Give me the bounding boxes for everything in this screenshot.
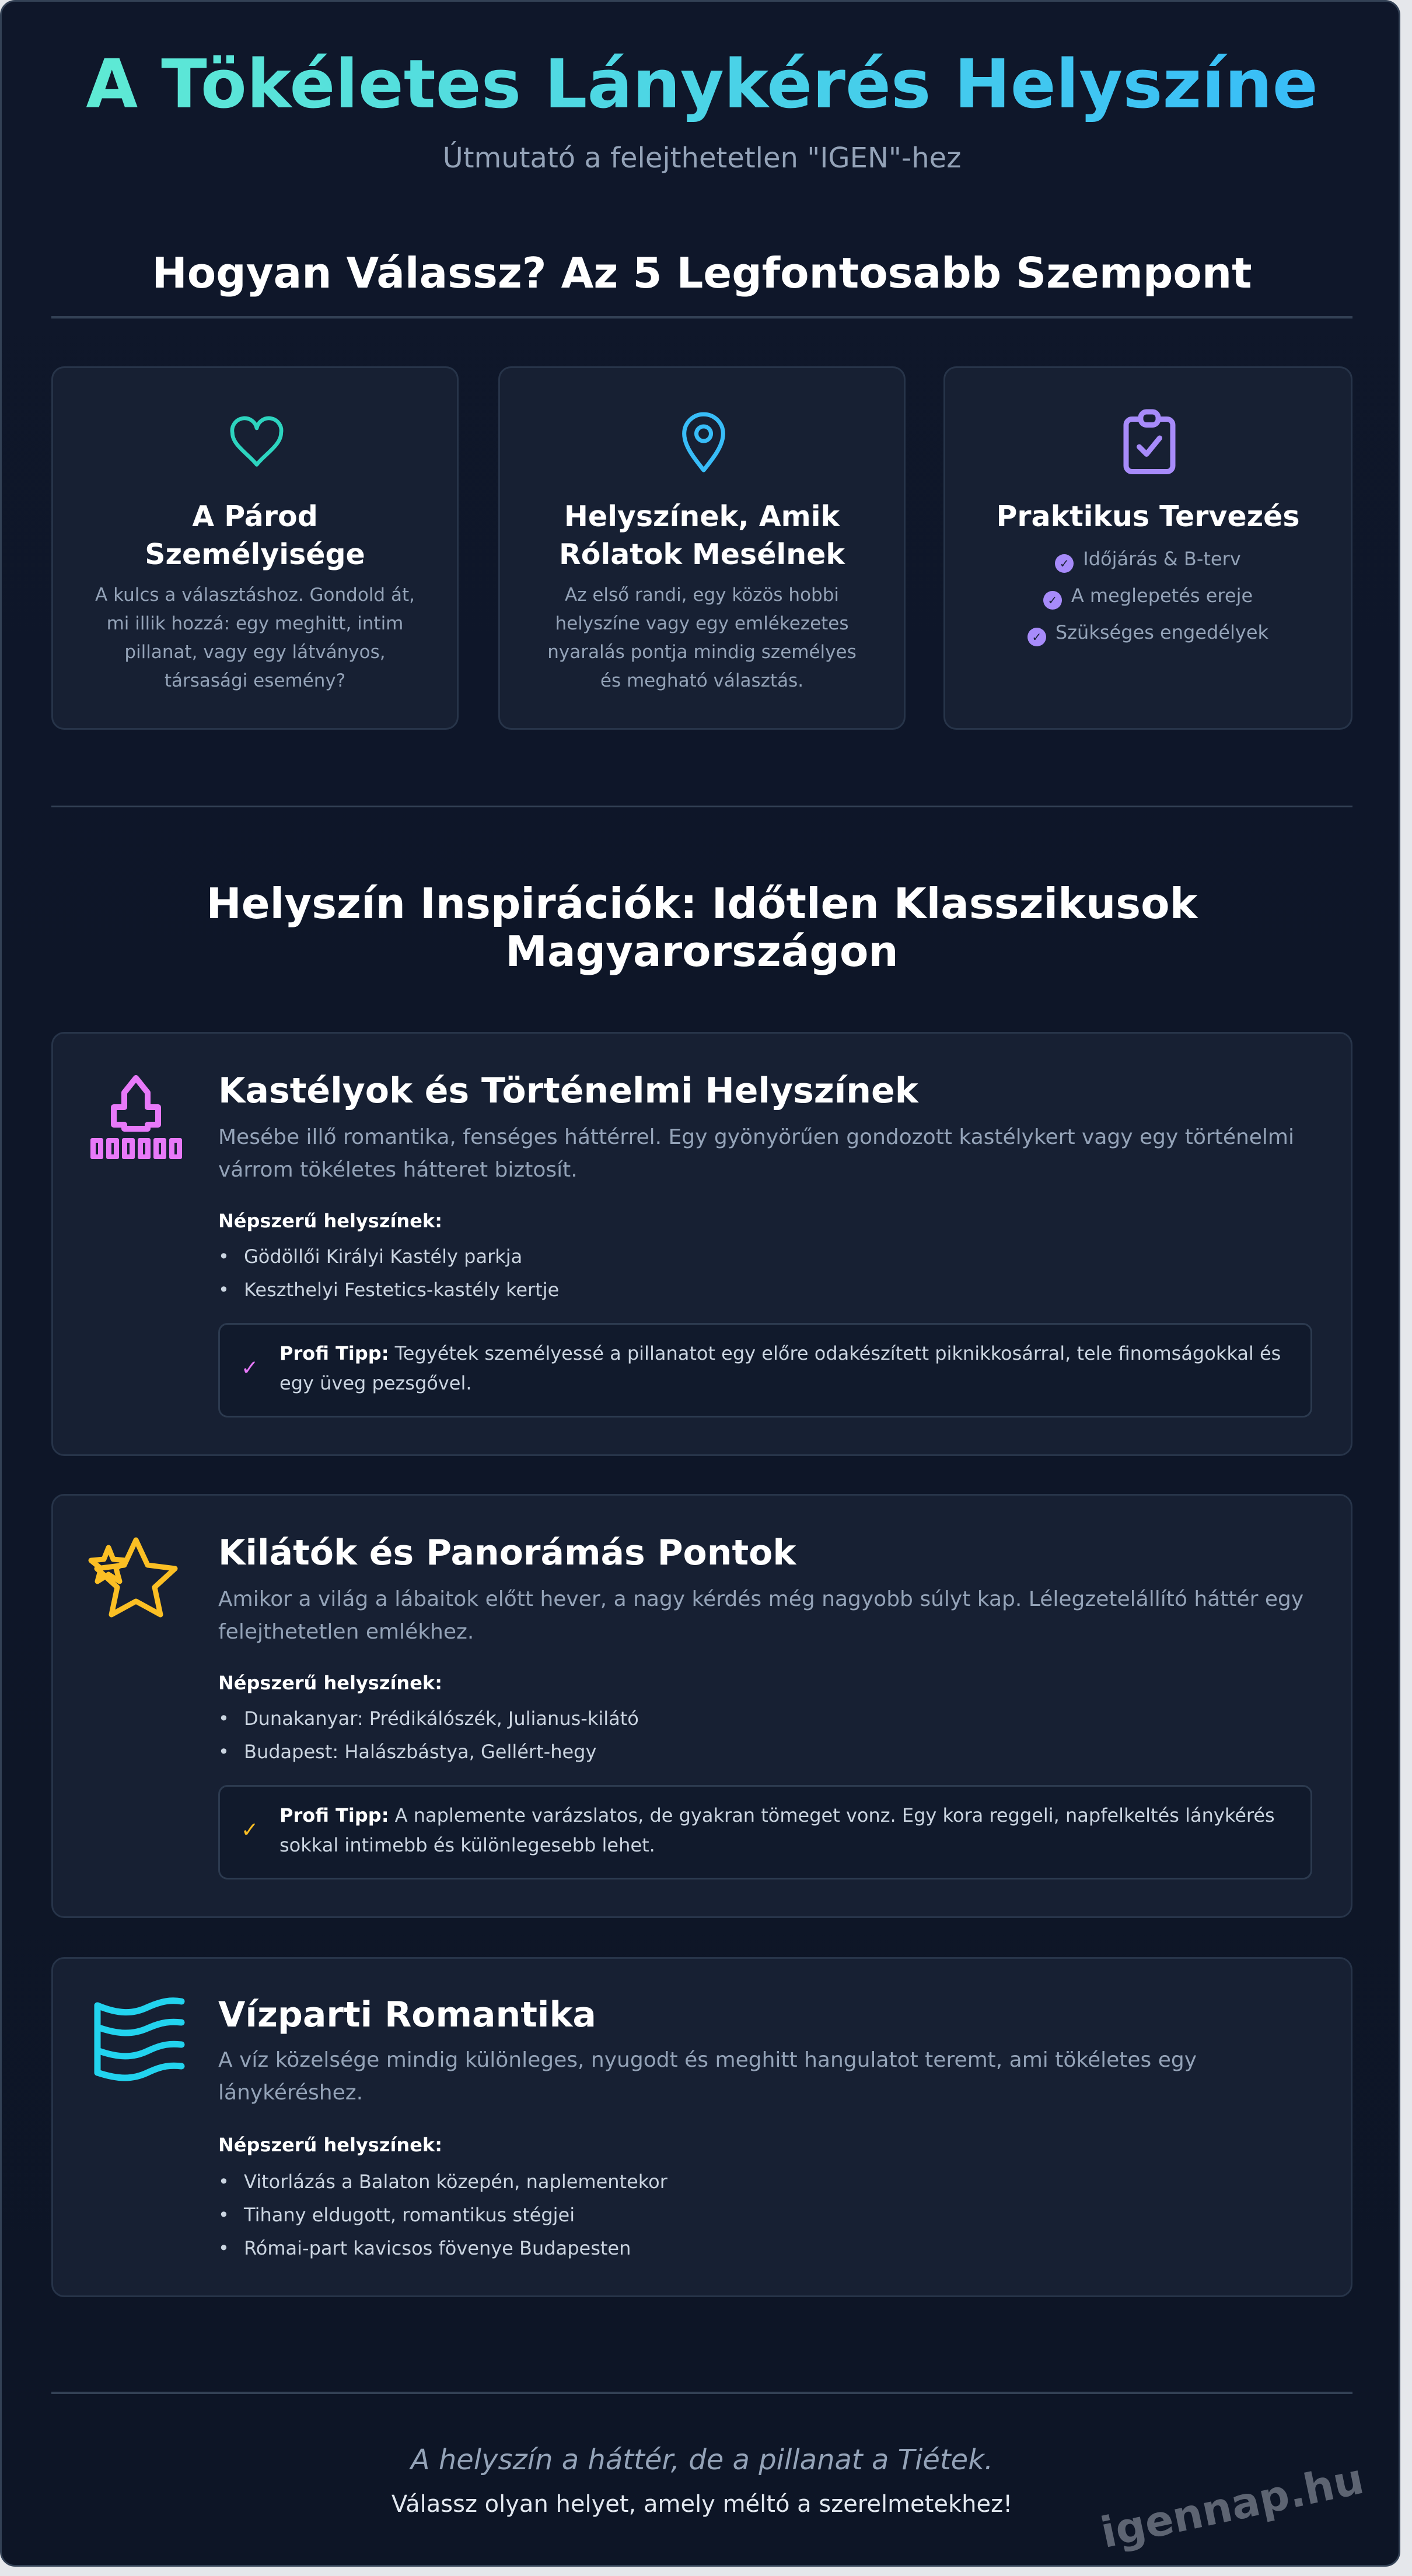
- card text: társasági esemény?: [165, 670, 345, 691]
- card text: pillanat, vagy egy látványos,: [124, 642, 386, 663]
- card title: Személyisége: [145, 538, 365, 571]
- card title: [559, 500, 845, 571]
- panel: viewpoints: [51, 1494, 1352, 1918]
- checklist: ✓: [1032, 630, 1041, 644]
- card title: Vízparti Romantika: [218, 1994, 596, 2035]
- watermark: igennap.hu: [1096, 2454, 1368, 2557]
- card text: helyszíne vagy egy emlékezetes: [555, 613, 849, 634]
- list heading: Népszerű helyszínek:: [218, 1210, 442, 1232]
- card text: nyaralás pontja mindig személyes: [547, 642, 857, 663]
- list: Keszthelyi Festetics-kastély kertje: [244, 1279, 559, 1301]
- icon: stars: [89, 1538, 177, 1617]
- callout: tip: [218, 1785, 1312, 1880]
- description: Amikor a világ a lábaitok előtt hever, a nagy kérdés még nagyobb súlyt kap. Lélegzetelállító háttér egy felejthetetlen emlékhez.: [218, 1587, 1303, 1644]
- panel: practical planning: [943, 366, 1352, 730]
- card text: [547, 584, 857, 691]
- checklist: ✓: [1047, 593, 1057, 607]
- description: A víz közelsége mindig különleges, nyugodt és meghitt hangulatot teremt, ami tökéletes egy lánykéréshez.: [218, 2048, 1197, 2105]
- card title: [145, 500, 365, 571]
- card text: Az első randi, egy közös hobbi: [565, 584, 839, 606]
- list: Tihany eldugott, romantikus stégjei: [244, 2204, 575, 2226]
- heading: section 2: Magyarországon: [505, 927, 899, 976]
- list: Vitorlázás a Balaton közepén, naplementekor: [244, 2171, 667, 2193]
- card title: Kastélyok és Történelmi Helyszínek: [218, 1070, 918, 1111]
- list heading: Népszerű helyszínek:: [218, 1672, 442, 1694]
- list: Dunakanyar: Prédikálószék, Julianus-kilátó: [244, 1707, 639, 1730]
- icon: heart: [230, 416, 284, 467]
- callout: tip: Profi Tipp: Tegyétek személyessé a pillanatot egy előre odakészített piknikkosárral, tele finomságokkal és egy üveg pezsgővel.: [279, 1342, 1281, 1394]
- checklist: A meglepetés ereje: [1071, 584, 1253, 607]
- list: Római-part kavicsos fövenye Budapesten: [244, 2237, 631, 2259]
- card title: Helyszínek, Amik: [564, 500, 840, 533]
- icon: clipboard: [1124, 410, 1175, 474]
- card title: Rólatok Mesélnek: [559, 538, 845, 571]
- panel: waterside: [51, 1957, 1352, 2297]
- list: [221, 1245, 559, 1301]
- description: Mesébe illő romantika, fenséges háttérrel. Egy gyönyörűen gondozott kastélykert vagy egy történelmi várrom tökéletes hátteret biztosít.: [218, 1125, 1294, 1182]
- checklist: Időjárás & B-terv: [1083, 548, 1241, 570]
- list: [221, 2171, 667, 2259]
- panel: places with story: [498, 366, 906, 730]
- callout: tip: ✓: [241, 1818, 258, 1842]
- list: Gödöllői Királyi Kastély parkja: [244, 1245, 522, 1268]
- list: [221, 1707, 639, 1763]
- checklist: [1027, 548, 1268, 646]
- heading: section 2: Helyszín Inspirációk: Időtlen Klasszikusok: [207, 879, 1197, 928]
- heading: section 1: Hogyan Válassz? Az 5 Legfontosabb Szempont: [152, 249, 1252, 298]
- card text: [95, 584, 415, 691]
- list: Budapest: Halászbástya, Gellért-hegy: [244, 1741, 596, 1763]
- card title: Praktikus Tervezés: [996, 500, 1300, 533]
- card text: és megható választás.: [600, 670, 803, 691]
- card title: A Párod: [192, 500, 318, 533]
- panel: castles: [51, 1032, 1352, 1456]
- callout: tip: ✓: [241, 1356, 258, 1380]
- footer quote: A helyszín a háttér, de a pillanat a Tiétek.: [411, 2444, 993, 2476]
- list heading: Népszerű helyszínek:: [218, 2134, 442, 2156]
- heading: section 2: [207, 879, 1198, 976]
- card text: A kulcs a választáshoz. Gondold át,: [95, 584, 415, 606]
- icon: castle: [90, 1075, 182, 1159]
- icon: waves: [95, 1997, 184, 2081]
- callout: tip: [218, 1323, 1312, 1418]
- checklist: Szükséges engedélyek: [1055, 621, 1268, 643]
- callout: tip: Profi Tipp: A naplemente varázslatos, de gyakran tömeget vonz. Egy kora reggeli, napfelkeltés lánykérés sokkal intimebb és különlegesebb lehet.: [279, 1804, 1275, 1856]
- title: A Tökéletes Lánykérés Helyszíne: [86, 46, 1318, 124]
- card title: Kilátók és Panorámás Pontok: [218, 1532, 796, 1573]
- icon: pin: [682, 412, 725, 473]
- panel: personality: [51, 366, 459, 730]
- footer text: Válassz olyan helyet, amely méltó a szerelmetekhez!: [392, 2491, 1012, 2518]
- subtitle: Útmutató a felejthetetlen "IGEN"-hez: [443, 142, 961, 174]
- checklist: ✓: [1060, 556, 1070, 570]
- card text: mi illik hozzá: egy meghitt, intim: [107, 613, 403, 634]
